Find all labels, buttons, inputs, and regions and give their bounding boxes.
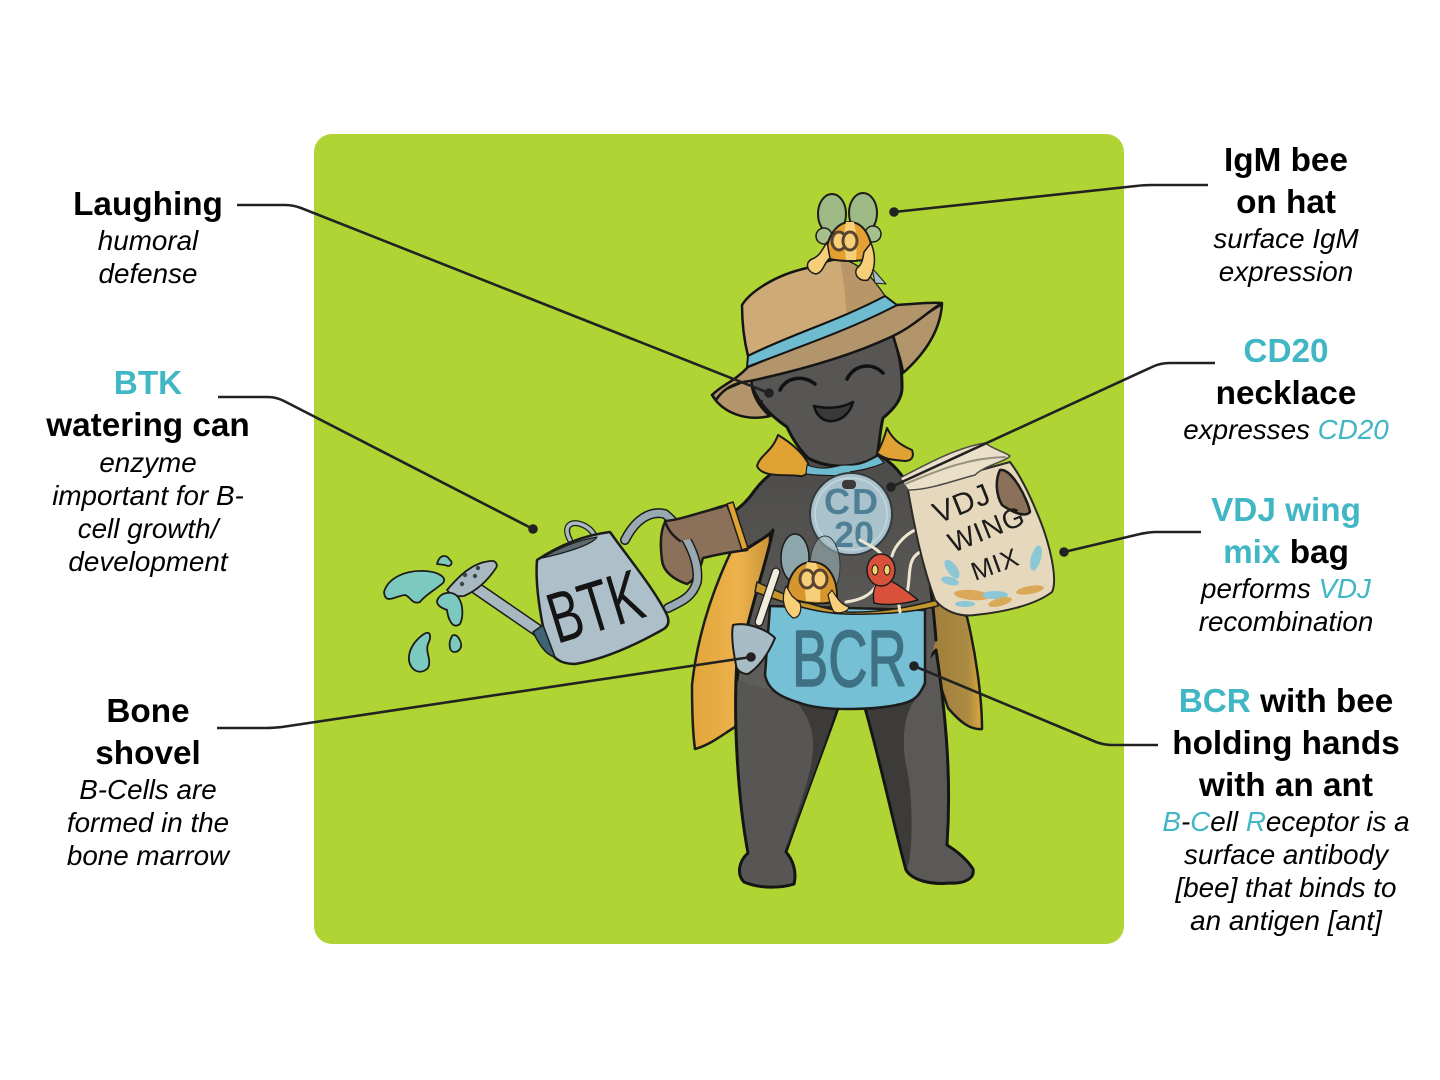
- left cape: [692, 490, 770, 749]
- label: CD20 necklace: expresses CD20: [1183, 414, 1389, 445]
- ant: [846, 530, 920, 612]
- BCR apron: BCR: [792, 615, 907, 704]
- label: BTK watering can: watering can: [46, 407, 250, 444]
- left leg: [736, 660, 838, 887]
- leader dots: [528, 207, 1069, 671]
- label: CD20 necklace: CD20: [1243, 333, 1329, 370]
- eyes: [832, 232, 846, 250]
- brim: [712, 303, 942, 400]
- right leg: [865, 650, 973, 883]
- label: BCR with bee: BCR with bee: [1179, 683, 1393, 720]
- label: IgM bee on hat: on hat: [1236, 184, 1336, 221]
- label: VDJ wing mix bag: VDJ wing: [1211, 492, 1361, 529]
- second bee wing right: [810, 536, 840, 596]
- label: VDJ wing mix bag: [1199, 492, 1373, 637]
- label: laughing: [73, 186, 223, 289]
- label: VDJ wing mix bag: recombination: [1199, 606, 1373, 637]
- line: BTK: [218, 397, 533, 529]
- leader lines: [217, 185, 1215, 745]
- label: IgM bee on hat: expression: [1219, 256, 1353, 287]
- glove: [661, 502, 748, 584]
- torso and arm fill: [727, 455, 936, 690]
- top handle: [567, 523, 597, 542]
- line: laughing: [237, 205, 769, 393]
- label: IgM bee on hat: surface IgM: [1213, 223, 1359, 254]
- label: CD20 necklace: necklace: [1216, 375, 1356, 412]
- label: BCR with bee: B-Cell Receptor is a: [1162, 806, 1410, 837]
- label: bone shovel: Bone: [106, 693, 190, 730]
- can body: [537, 532, 668, 664]
- crown: [742, 260, 885, 356]
- BCR apron: [765, 606, 925, 709]
- scarf: [806, 456, 884, 484]
- label: BCR with bee: an antigen [ant]: [1190, 905, 1382, 936]
- belt: [755, 582, 938, 614]
- label: CD20 necklace: [1183, 333, 1389, 445]
- label: IgM bee on hat: IgM bee: [1224, 142, 1348, 179]
- VDJ wing mix bag: WING: [944, 500, 1030, 559]
- face: [780, 366, 883, 421]
- label: BTK watering can: BTK: [114, 365, 182, 402]
- label: BTK watering can: cell growth/: [78, 513, 218, 544]
- collar: [757, 428, 913, 476]
- back handle: [625, 513, 697, 608]
- water splashes: [384, 556, 462, 672]
- CD20 medallion: CD: [824, 481, 880, 522]
- label: BCR with bee: surface antibody: [1184, 839, 1388, 870]
- label: BTK watering can: [46, 365, 250, 577]
- VDJ wing mix bag: VDJ: [928, 478, 996, 530]
- CD20 medallion: 20: [834, 514, 874, 555]
- label: BCR with bee: holding hands: [1172, 725, 1400, 762]
- sprinkler head: [447, 561, 497, 596]
- label: laughing: defense: [99, 258, 197, 289]
- VDJ wing mix bag: MIX: [967, 542, 1023, 587]
- torso outline: [727, 455, 936, 680]
- VDJ wing mix bag: [900, 443, 1054, 615]
- BTK text: BTK: [538, 555, 653, 660]
- label: bone shovel: bone marrow: [67, 840, 229, 871]
- hat back brim right: [893, 304, 942, 373]
- right eye: [847, 366, 883, 379]
- legs: [736, 650, 973, 887]
- label: BTK watering can: development: [68, 546, 228, 577]
- arms: [807, 242, 830, 274]
- label: BCR with bee: [bee] that binds to: [1176, 872, 1396, 903]
- label: bone shovel: formed in the: [67, 807, 229, 838]
- label: laughing: Laughing: [73, 186, 223, 223]
- ear: [747, 388, 762, 401]
- hat back brim: [712, 378, 770, 418]
- label: BTK watering can: important for B-: [52, 480, 244, 511]
- label: BCR with bee: with an ant: [1199, 767, 1373, 804]
- hat front: [712, 260, 942, 400]
- label: bone shovel: [67, 693, 230, 871]
- label: bone shovel: shovel: [95, 735, 201, 772]
- label: laughing: humoral: [98, 225, 198, 256]
- spout: [476, 588, 540, 632]
- label: bone shovel: B-Cells are: [79, 774, 217, 805]
- second bee wing left: [781, 534, 809, 582]
- line: VDJ: [1064, 532, 1201, 552]
- line: IgM bee: [894, 185, 1208, 212]
- CD20 medallion: [810, 473, 892, 555]
- line: BCR: [914, 666, 1158, 745]
- bone shovel: [732, 572, 776, 674]
- line: CD20: [891, 363, 1215, 487]
- bee on hat: [807, 193, 886, 284]
- label: BTK watering can: enzyme: [99, 447, 197, 478]
- head: [748, 335, 902, 466]
- left eye: [780, 378, 815, 390]
- label: IgM bee on hat: [1213, 142, 1359, 287]
- label: VDJ wing mix bag: performs VDJ: [1201, 573, 1371, 604]
- right cape: [925, 500, 982, 729]
- character: [384, 193, 1054, 887]
- BTK watering can: [384, 507, 728, 672]
- fingers over handle: [665, 507, 728, 541]
- wings: [818, 194, 846, 234]
- line: bone shovel: [217, 657, 751, 728]
- label: VDJ wing mix bag: mix bag: [1223, 534, 1349, 571]
- mouth: [814, 402, 853, 421]
- label: BCR with bee: [1162, 683, 1410, 936]
- hat band: [747, 296, 897, 367]
- bee on belt: [783, 562, 849, 618]
- body: [826, 222, 872, 261]
- green panel: [314, 134, 1124, 944]
